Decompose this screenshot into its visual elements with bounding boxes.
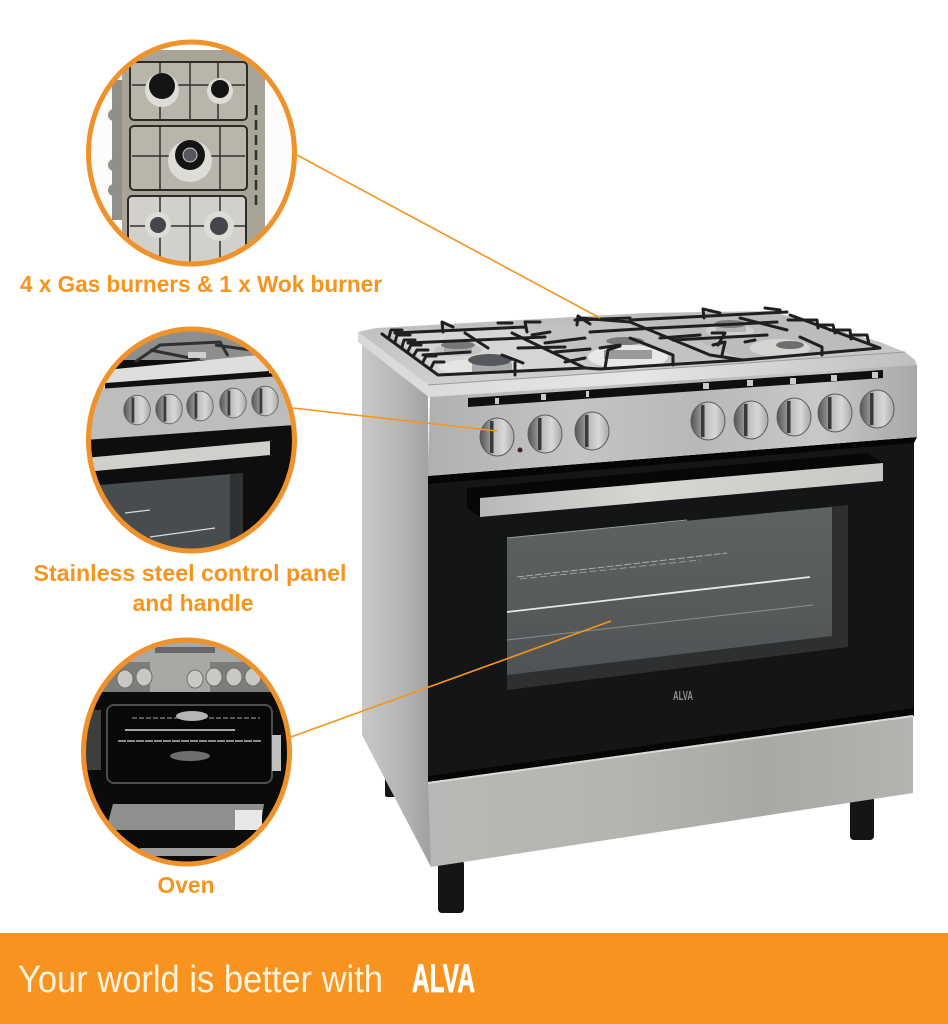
caption: control panel: Stainless steel control panel — [34, 560, 346, 586]
oven racks — [507, 520, 813, 640]
drawer highlight — [428, 715, 913, 784]
right grate — [743, 315, 880, 360]
oven door — [428, 438, 914, 783]
footer ALVA logo: ALVA — [412, 957, 475, 1001]
stove side panel — [362, 340, 431, 867]
control panel — [428, 365, 917, 476]
middle grate — [580, 318, 743, 369]
callout circle: control panel — [85, 325, 300, 560]
oven door handle — [467, 453, 883, 517]
steel hob wells — [392, 316, 875, 375]
stove feet — [385, 770, 874, 913]
door lower gap — [428, 708, 914, 783]
rim edge — [428, 352, 905, 385]
connector line: oven — [291, 621, 611, 737]
footer slogan: Your world is better with — [18, 959, 383, 1001]
front rim — [358, 332, 917, 398]
caption: burners: 4 x Gas burners & 1 x Wok burner — [20, 271, 382, 297]
oven ring — [84, 640, 290, 864]
door shadow gap — [428, 437, 917, 484]
callout circle: oven — [80, 638, 295, 868]
caption: oven: Oven — [158, 872, 214, 898]
callout circle: burners — [85, 40, 300, 270]
cooktop surface — [358, 311, 905, 385]
control panel ring — [88, 329, 294, 551]
control knobs — [480, 390, 894, 456]
indicator light — [518, 448, 522, 452]
strip icons — [495, 372, 878, 404]
oven window — [507, 505, 848, 690]
footer band — [0, 933, 948, 1024]
stove product — [358, 308, 917, 913]
bottom drawer — [428, 715, 913, 867]
connector line: control panel — [293, 408, 497, 431]
burners ring — [88, 42, 294, 264]
caption: handle: and handle — [132, 590, 254, 616]
connector line: burners — [297, 155, 600, 318]
pan supports — [382, 308, 880, 375]
left grate — [382, 333, 585, 375]
label strip — [468, 370, 883, 407]
door logo: ALVA — [673, 688, 693, 703]
burners — [434, 320, 810, 375]
